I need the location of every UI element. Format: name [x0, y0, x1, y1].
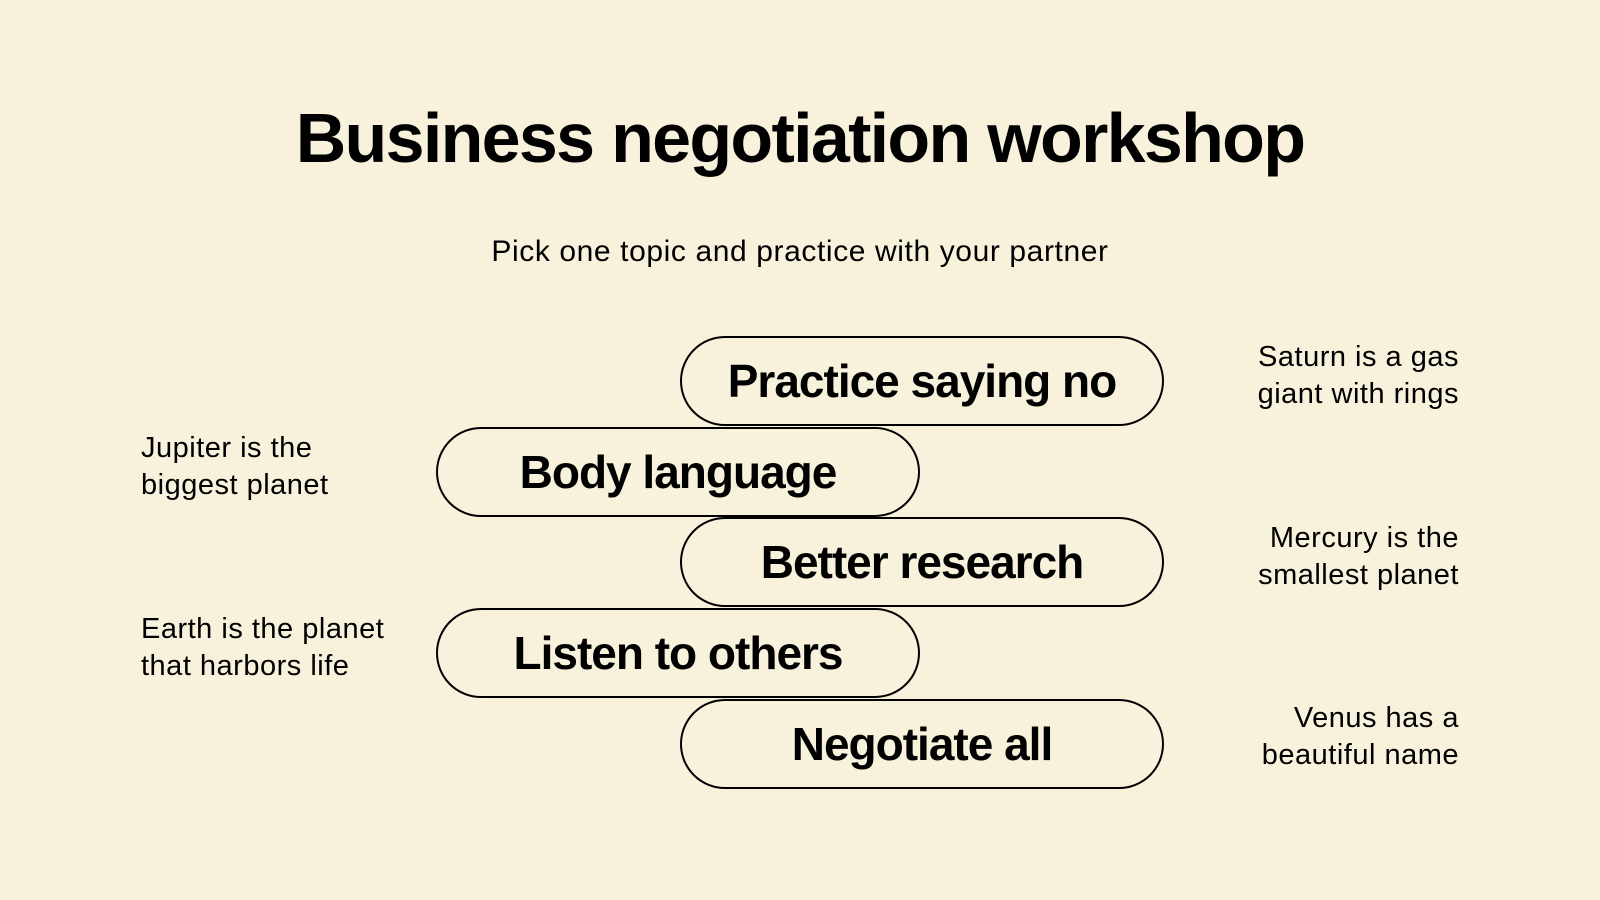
- note: venus: Venus has a: [1294, 702, 1459, 734]
- note: venus: beautiful name: [1262, 739, 1459, 771]
- pill: body language: [436, 427, 920, 517]
- note: earth: [141, 613, 384, 682]
- note: saturn: giant with rings: [1258, 378, 1459, 410]
- note: saturn: [1258, 341, 1459, 410]
- pill: negotiate all: [680, 699, 1164, 789]
- note: venus: [1262, 702, 1459, 771]
- pill: better research: Better research: [761, 536, 1083, 588]
- note: jupiter: [141, 432, 329, 501]
- pill: body language: Body language: [520, 446, 836, 498]
- subtitle: Pick one topic and practice with your partner: [491, 235, 1109, 268]
- pill: listen to others: [436, 608, 920, 698]
- note: jupiter: Jupiter is the: [141, 432, 312, 464]
- note: mercury: smallest planet: [1258, 559, 1459, 591]
- note: saturn: Saturn is a gas: [1258, 341, 1459, 373]
- pill: negotiate all: Negotiate all: [792, 718, 1052, 770]
- pill: listen to others: Listen to others: [513, 627, 843, 679]
- pill: practice saying no: Practice saying no: [728, 355, 1116, 407]
- note: jupiter: biggest planet: [141, 469, 329, 501]
- pill: practice saying no: [680, 336, 1164, 426]
- pill: better research: [680, 517, 1164, 607]
- note: mercury: [1258, 522, 1459, 591]
- note: earth: Earth is the planet: [141, 613, 384, 645]
- title: Business negotiation workshop: [296, 99, 1304, 177]
- note: earth: that harbors life: [141, 650, 349, 682]
- note: mercury: Mercury is the: [1270, 522, 1459, 554]
